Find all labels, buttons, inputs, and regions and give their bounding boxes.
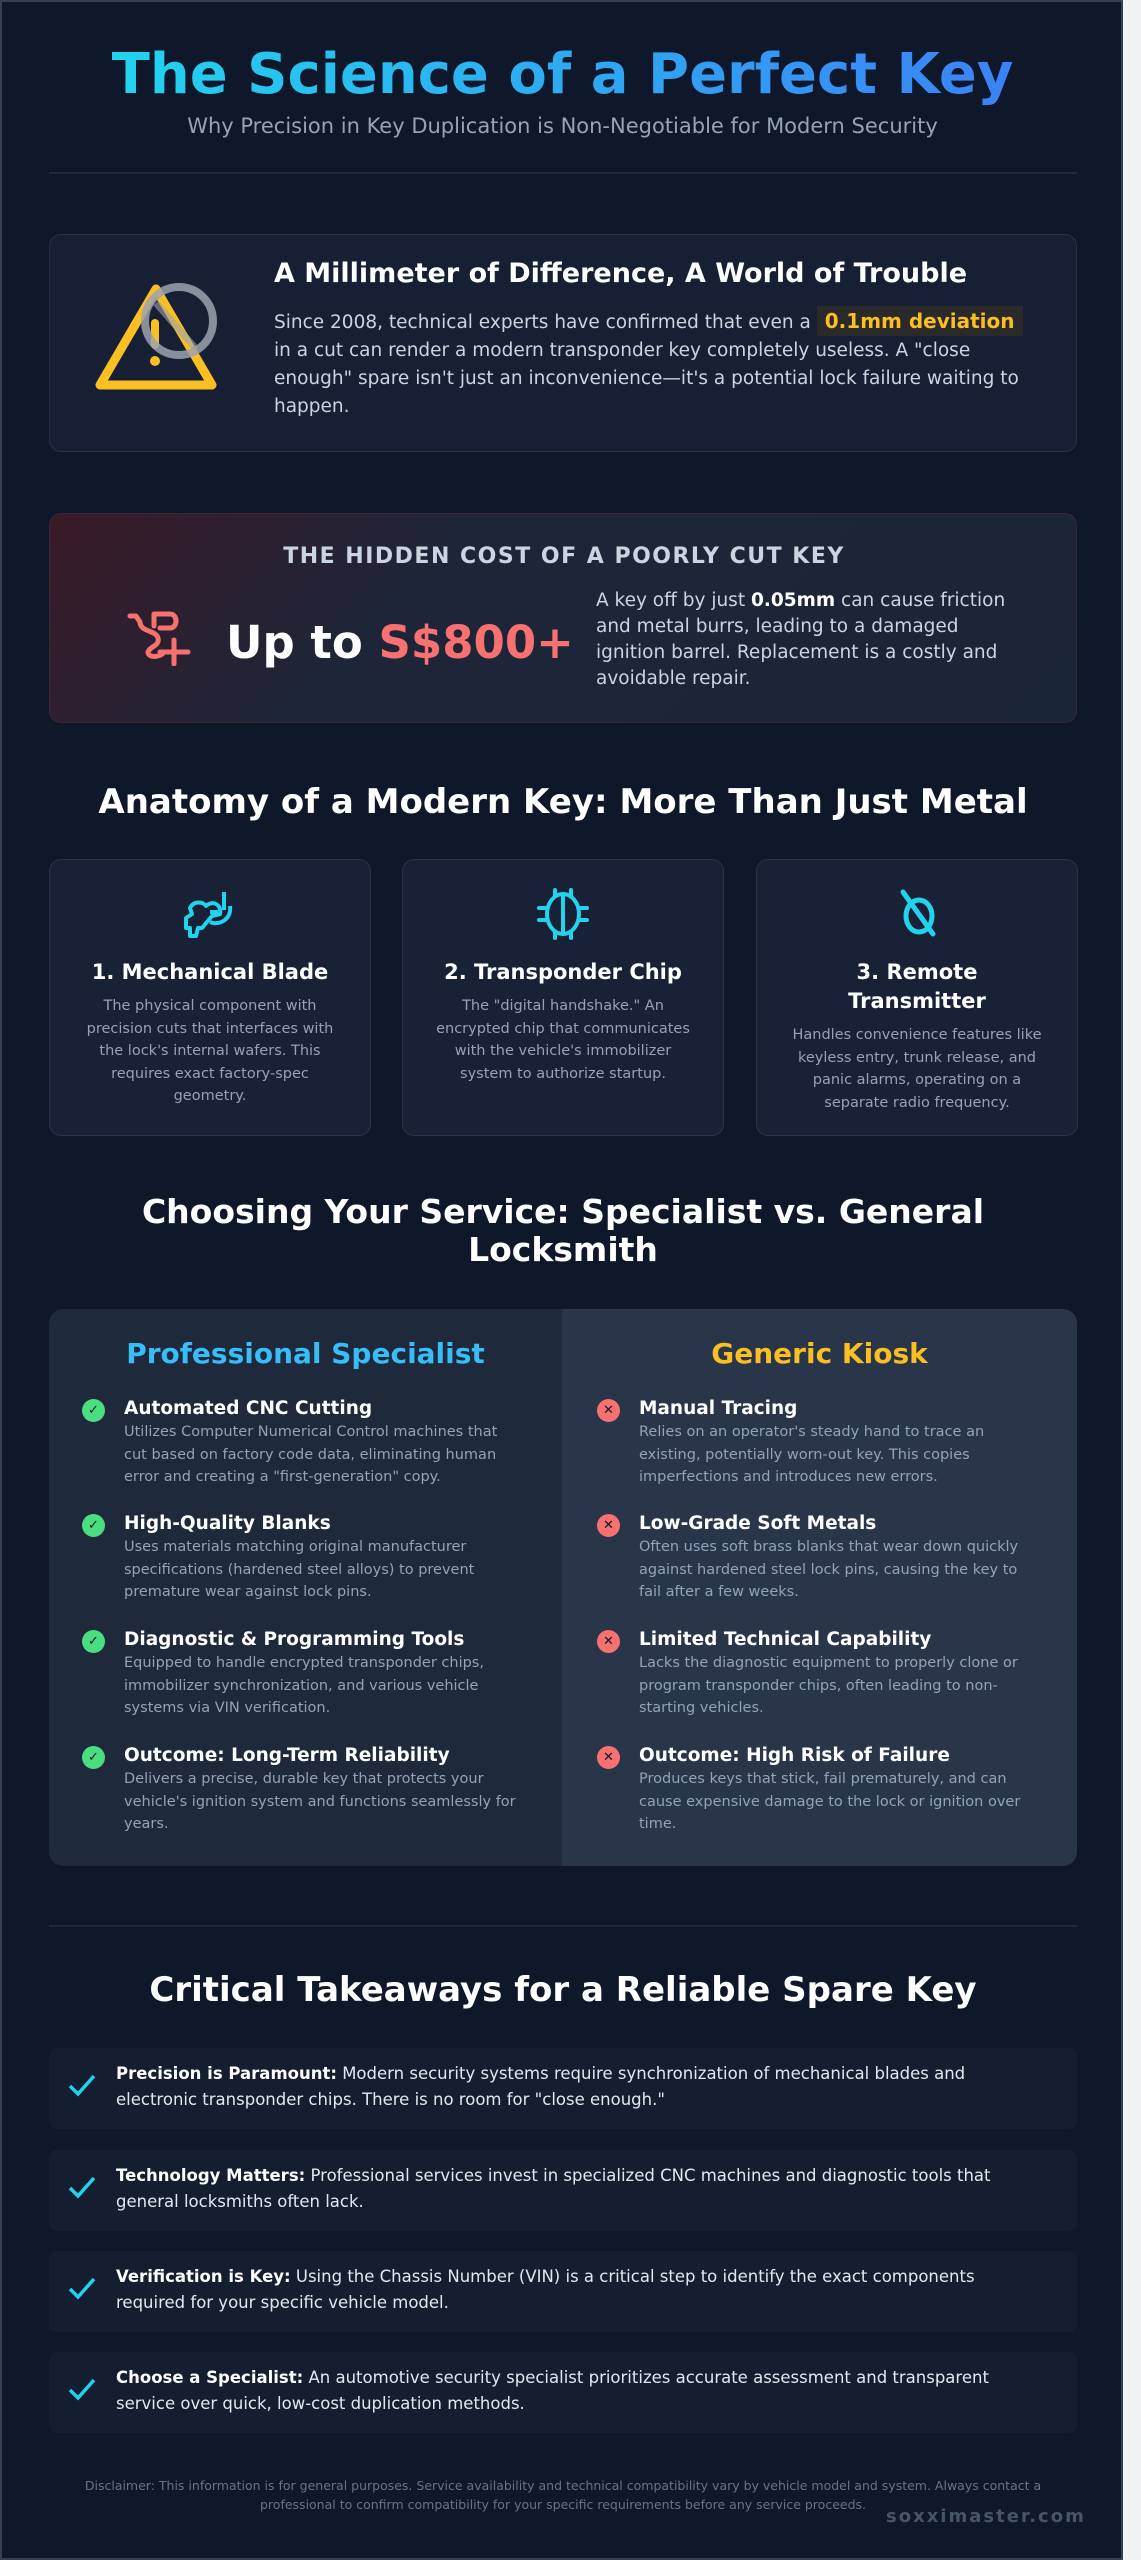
item: failure: Outcome: High Risk of Failure: [639, 1745, 950, 1766]
item: CNC: ✓: [88, 1403, 99, 1418]
icon: chip: [537, 888, 589, 940]
panel: remote transmitter: [756, 859, 1078, 1136]
heading: THE HIDDEN COST OF A POORLY CUT KEY: [283, 544, 845, 569]
item: limited capability: Lacks the diagnostic equipment to properly clone or program transponder chips, often leading to non-starting vehicles.: [639, 1655, 1018, 1716]
takeaway 1: Precision is Paramount: Modern security systems require synchronization of mechanical blades and electronic transponder chips. There is no room for "close enough.": [116, 2064, 965, 2109]
takeaway 2: [49, 2150, 1077, 2231]
item: blanks: [82, 1513, 474, 1600]
text block: A key off by just 0.05mm can cause friction and metal burrs, leading to a damaged ignition barrel. Replacement is a costly and avoidable repair.: [596, 590, 1005, 689]
takeaway 2: Technology Matters: Professional services invest in specialized CNC machines and diagnostic tools that general locksmiths often lack.: [116, 2166, 991, 2211]
heading: takeaways: Critical Takeaways for a Reliable Spare Key: [149, 1970, 977, 2010]
item: soft metals: Low-Grade Soft Metals: [639, 1513, 876, 1534]
icon: remote: [900, 890, 936, 936]
heading: anatomy: Anatomy of a Modern Key: More Than Just Metal: [98, 782, 1028, 822]
panel: comparison: [49, 1309, 1077, 1866]
title: The Science of a Perfect Key: [112, 42, 1013, 107]
item: diagnostic: Equipped to handle encrypted transponder chips, immobilizer synchronization, and various vehicle systems via VIN verification.: [124, 1655, 484, 1716]
icon: blade: [184, 892, 232, 938]
item: CNC: [82, 1398, 497, 1485]
item: manual tracing: Relies on an operator's steady hand to trace an existing, potentially worn-out key. This copies imperfections and introduces new errors.: [639, 1424, 984, 1485]
item: limited capability: [597, 1629, 1018, 1716]
item: failure: ✕: [603, 1750, 614, 1765]
takeaway 3: Verification is Key: Using the Chassis Number (VIN) is a critical step to identify the exact components required for your specific vehicle model.: [116, 2267, 975, 2312]
item: manual tracing: ✕: [603, 1403, 614, 1418]
panel: transponder chip: The "digital handshake." An encrypted chip that communicates with the vehicle's immobilizer system to authorize startup.: [436, 998, 690, 1082]
item: soft metals: [597, 1513, 1018, 1600]
panel: remote transmitter: 3. Remote Transmitter: [848, 960, 986, 1013]
panel: mechanical blade: 1. Mechanical Blade: [92, 960, 328, 984]
item: failure: Produces keys that stick, fail prematurely, and can cause expensive damage to the lock or ignition over time.: [639, 1771, 1020, 1832]
item: reliability: Outcome: Long-Term Reliability: [124, 1745, 450, 1766]
item: reliability: ✓: [88, 1750, 99, 1765]
item: soft metals: ✕: [603, 1518, 614, 1533]
item: diagnostic: ✓: [88, 1634, 99, 1649]
item: blanks: Uses materials matching original manufacturer specifications (hardened steel alloys) to prevent premature wear against lock pins.: [124, 1539, 474, 1600]
item: reliability: Delivers a precise, durable key that protects your vehicle's ignition system and functions seamlessly for years.: [124, 1771, 516, 1832]
item: blanks: High-Quality Blanks: [124, 1513, 331, 1534]
item: manual tracing: [597, 1398, 984, 1485]
item: diagnostic: [82, 1629, 484, 1716]
icon: warning: [96, 283, 217, 390]
heading: professional specialist: Professional Specialist: [126, 1337, 485, 1370]
takeaway 1: [49, 2048, 1077, 2129]
takeaway 3: [49, 2251, 1077, 2332]
item: diagnostic: Diagnostic & Programming Tools: [124, 1629, 464, 1650]
heading: choosing service: Choosing Your Service: Specialist vs. General Locksmith: [142, 1192, 984, 1269]
panel: transponder chip: [402, 859, 724, 1136]
panel: remote transmitter: Handles convenience features like keyless entry, trunk release, and panic alarms, operating on a separate radio frequency.: [792, 1027, 1042, 1110]
text block: Since 2008, technical experts have confirmed that even a 0.1mm deviation in a cut can render a modern transponder key completely useless. A "close enough" spare isn't just an inconvenience—it's a potential lock failure waiting to happen.: [274, 309, 1019, 417]
item: soft metals: Often uses soft brass blanks that wear down quickly against hardened steel lock pins, causing the key to fail after a few weeks.: [639, 1539, 1018, 1600]
heading: A Millimeter of Difference, A World of Trouble: [274, 258, 967, 289]
item: reliability: [82, 1745, 516, 1832]
item: failure: [597, 1745, 1020, 1832]
icon: broken key: [128, 612, 190, 666]
item: CNC: Utilizes Computer Numerical Control machines that cut based on factory code data, eliminating human error and creating a "first-generation" copy.: [124, 1424, 497, 1485]
heading: generic kiosk: Generic Kiosk: [711, 1337, 928, 1370]
item: CNC: Automated CNC Cutting: [124, 1398, 372, 1419]
panel: transponder chip: 2. Transponder Chip: [444, 960, 682, 984]
takeaway 4: [49, 2352, 1077, 2433]
item: limited capability: Limited Technical Capability: [639, 1629, 931, 1650]
item: limited capability: ✕: [603, 1634, 614, 1649]
subtitle: Why Precision in Key Duplication is Non-Negotiable for Modern Security: [187, 114, 938, 138]
takeaway 4: Choose a Specialist: An automotive security specialist prioritizes accurate assessment and transparent service over quick, low-cost duplication methods.: [116, 2368, 989, 2413]
panel: mechanical blade: [49, 859, 371, 1136]
stat: Up to S$800+: [226, 616, 574, 669]
panel: millimeter warning: [49, 234, 1077, 452]
disclaimer: Disclaimer: This information is for general purposes. Service availability and technical compatibility vary by vehicle model and system. Always contact a professional to confirm compatibility for your specific requirements before any service proceeds.: [85, 2478, 1041, 2512]
panel: mechanical blade: The physical component with precision cuts that interfaces with the lock's internal wafers. This requires exact factory-spec geometry.: [87, 998, 333, 1104]
item: manual tracing: Manual Tracing: [639, 1398, 797, 1419]
watermark: soxximaster.com: [886, 2506, 1086, 2527]
item: blanks: ✓: [88, 1518, 99, 1533]
panel: hidden cost: [49, 513, 1077, 723]
